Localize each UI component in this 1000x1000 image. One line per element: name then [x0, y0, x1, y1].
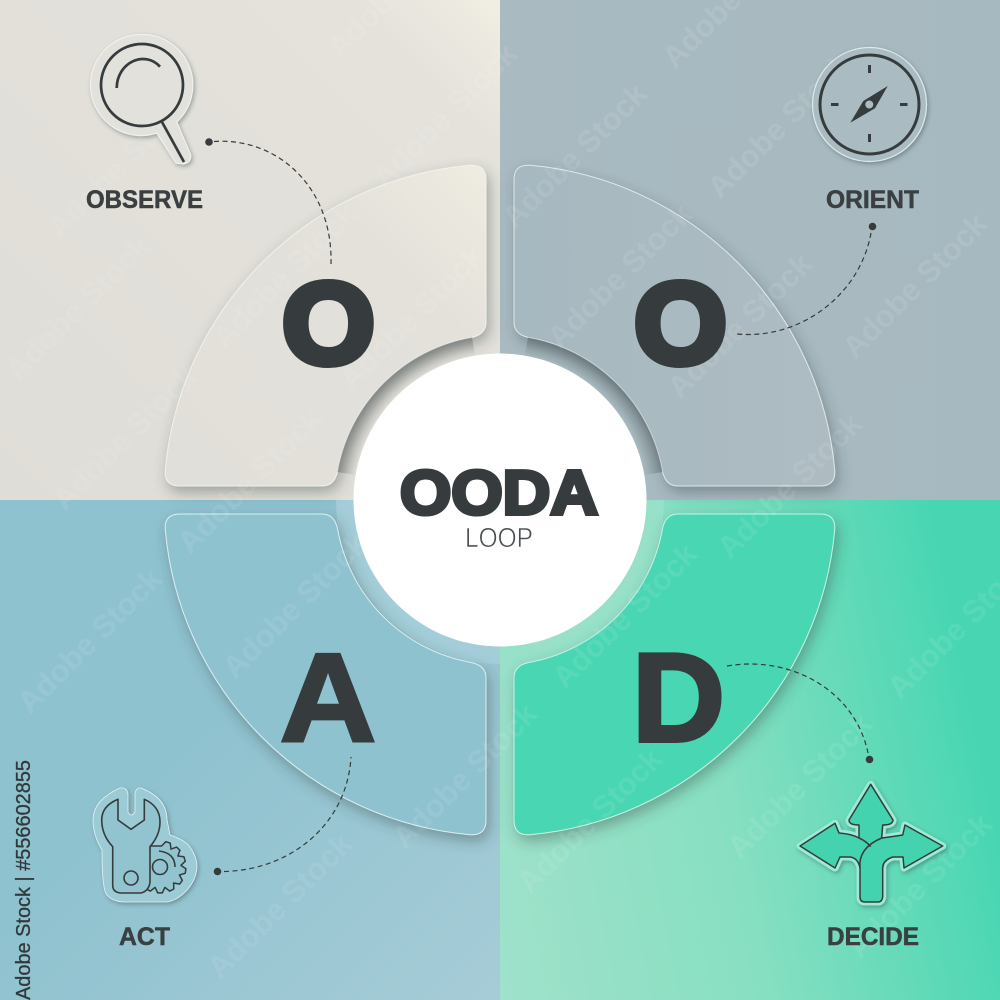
background quadrant: orient: [500, 0, 1000, 500]
connector: orient: [737, 223, 876, 335]
panel: decide segment: [514, 514, 835, 835]
watermarks: Adobe Stock: [10, 561, 169, 720]
watermarks: Adobe Stock: [170, 401, 329, 560]
lighter ring: act side: [336, 500, 500, 664]
connector: observe: [205, 138, 331, 264]
segment letter: D: D: [632, 627, 725, 768]
watermarks: Adobe Stock: [0, 228, 157, 387]
label: OBSERVE: OBSERVE: [86, 186, 203, 214]
ring shadow: observe side: [337, 337, 475, 475]
watermarks: Adobe Stock: [365, 36, 524, 195]
watermarks: Adobe Stock: [205, 196, 364, 355]
icon: three-way arrows: [800, 784, 943, 902]
icon: compass: [812, 48, 926, 162]
watermarks: Adobe Stock: [720, 706, 879, 865]
center circle: [354, 354, 646, 646]
watermarks: Adobe Stock: [545, 536, 704, 695]
subtitle: LOOP: LOOP: [465, 522, 533, 553]
panel: observe segment: [165, 165, 486, 486]
connector: decide: [727, 664, 873, 763]
panel: act segment: [165, 514, 486, 835]
connector: act: [214, 757, 351, 875]
label: ACT: ACT: [119, 923, 170, 951]
watermarks: Adobe Stock: [540, 196, 699, 355]
watermarks: Adobe Stock: [700, 46, 859, 205]
watermarks: Adobe Stock: [510, 741, 669, 900]
background quadrant: act: [0, 500, 500, 1000]
watermarks: Adobe Stock: [495, 76, 654, 235]
label: ORIENT: ORIENT: [826, 186, 919, 214]
segment letter: O (observe): O: [282, 260, 375, 388]
segment letter: O (orient): O: [634, 260, 727, 388]
icon: magnifier: [91, 34, 193, 164]
title: OODA: OODA: [400, 459, 598, 528]
watermarks: Adobe Stock: [835, 206, 994, 365]
watermarks: Adobe Stock: [840, 806, 999, 965]
watermarks: Adobe Stock: [385, 696, 544, 855]
lighter ring: decide side: [500, 500, 664, 664]
background quadrant: decide: [500, 500, 1000, 1000]
icon: wrench and gear: [93, 788, 197, 902]
watermarks: Adobe Stock: [660, 246, 819, 405]
stock credit: Adobe Stock | #556602855: [12, 760, 35, 1000]
watermarks: Adobe Stock: [200, 826, 359, 985]
watermarks: Adobe Stock: [332, 238, 491, 397]
watermarks: Adobe Stock: [45, 358, 204, 517]
segment letter: A: A: [280, 626, 376, 768]
ring shadow: orient side: [525, 337, 663, 475]
background quadrant: observe: [0, 0, 500, 500]
watermarks: Adobe Stock: [40, 86, 199, 245]
watermarks: Adobe Stock: [215, 526, 374, 685]
label: DECIDE: DECIDE: [827, 923, 919, 951]
watermarks: Adobe Stock: [710, 406, 869, 565]
panel: orient segment: [514, 165, 835, 486]
